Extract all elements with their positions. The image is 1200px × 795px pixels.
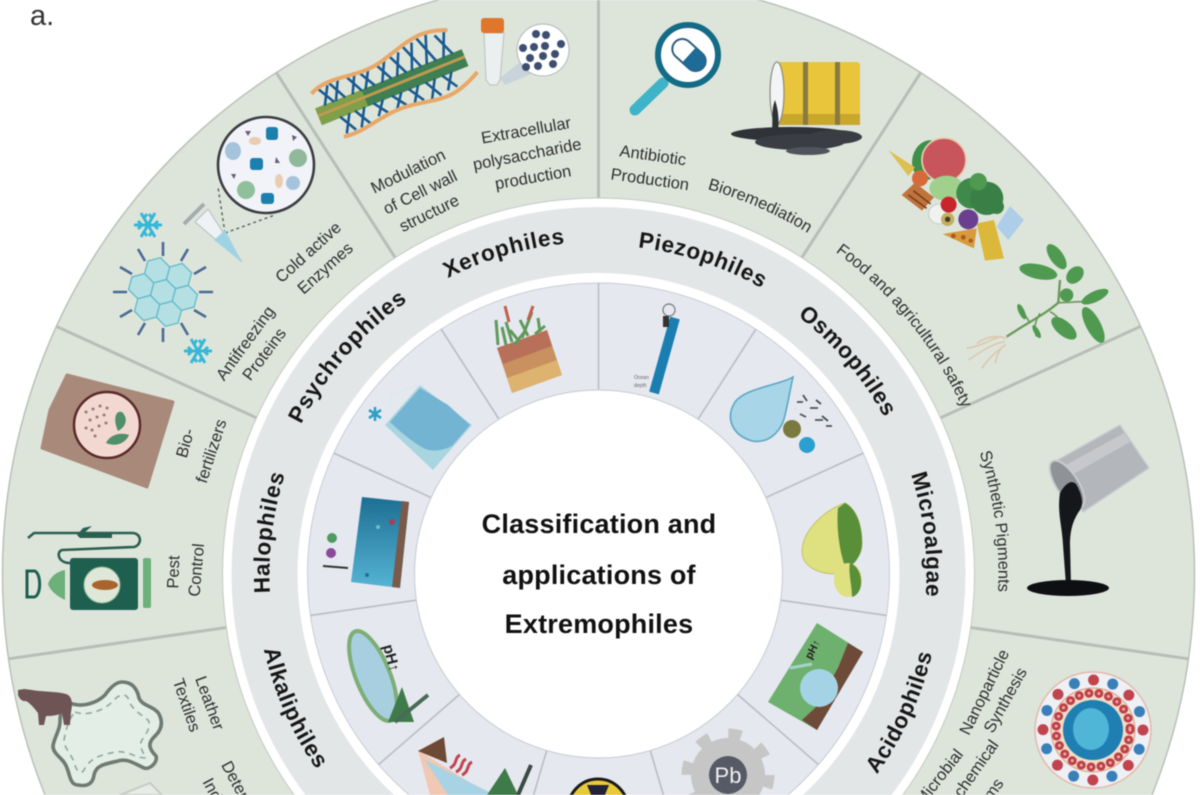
icon: pouring bucket and pigment bbox=[1027, 425, 1149, 596]
text: Antifreezing Proteins: Proteins bbox=[239, 325, 290, 384]
text: Leather Textiles: Textiles bbox=[169, 676, 204, 734]
icon: nanoparticle bbox=[1035, 672, 1151, 788]
icon: iceberg bbox=[369, 385, 472, 470]
icon: acidic lake landscape: pH↑ bbox=[803, 638, 823, 661]
center title: applications of bbox=[502, 560, 697, 590]
text: Extracellular polysaccharide production: polysaccharide bbox=[471, 135, 583, 174]
text: Extracellular polysaccharide production bbox=[471, 114, 583, 193]
text: Bio-fertilizers: fertilizers bbox=[193, 417, 230, 485]
center title bbox=[482, 509, 716, 639]
text: Pest Control: Control bbox=[185, 543, 208, 597]
text: Food and agricultural safety: Food and agricultural safety bbox=[836, 243, 971, 406]
icon: osmotic water drop bbox=[730, 377, 832, 453]
panel label: a.: a. bbox=[30, 0, 54, 32]
icon: radiation symbol bbox=[568, 779, 628, 795]
icon: gear with Pb bbox=[687, 734, 769, 795]
text: Leather Textiles bbox=[169, 674, 227, 734]
text: Pest Control bbox=[164, 543, 208, 597]
icon: saline water bbox=[323, 497, 409, 588]
text: Antifreezing Proteins: Antifreezing bbox=[213, 303, 279, 384]
icon: snowflake lower bbox=[184, 339, 212, 363]
icon: pest control sprayer bbox=[27, 526, 151, 610]
icon: magnifier with capsule bbox=[635, 25, 718, 110]
icon: detergent packet bbox=[120, 783, 162, 795]
text: Synthetic Pigments: Synthetic Pigments bbox=[979, 450, 1010, 592]
icon: pressure depth column bbox=[634, 304, 675, 393]
label: Xerophiles: Xerophiles bbox=[441, 231, 564, 278]
icon: cell wall structure bbox=[304, 20, 482, 144]
icon: alkaline lake bbox=[339, 625, 428, 727]
icon: pressure depth column: Ocean bbox=[634, 375, 649, 381]
label: Osmophiles: Osmophiles bbox=[800, 306, 894, 416]
icon: hot spring and volcano bbox=[418, 737, 531, 795]
label: Acidophiles: Acidophiles bbox=[867, 652, 932, 774]
icon: soil layers with plants bbox=[496, 306, 562, 393]
text: Modulation of Cell wall structure: structure bbox=[397, 192, 462, 236]
icon: falcon tube and polysaccharide circle bbox=[481, 18, 569, 85]
icon: enzyme magnified circle bbox=[218, 117, 314, 213]
icon: oil barrel and spill bbox=[731, 62, 862, 155]
text: Modulation of Cell wall structure: of Cell wall bbox=[381, 167, 460, 218]
label: Halophiles: Halophiles bbox=[252, 472, 284, 593]
icon: microalgae bbox=[802, 503, 862, 597]
icon: fertilizer bag bbox=[42, 375, 173, 487]
icon: gear with Pb: Pb bbox=[715, 763, 741, 788]
text: Antibiotic Production bbox=[610, 142, 690, 194]
text: Pest Control: Pest bbox=[164, 555, 183, 589]
icon: alkaline lake: pH↑ bbox=[379, 643, 403, 674]
text: Microbial Nanoparticle Biochemical Synthesis: Synthesis bbox=[980, 665, 1031, 736]
center title: Extremophiles bbox=[505, 609, 693, 639]
icon: microtube with dashed zoom lines bbox=[184, 187, 275, 262]
icon: antifreeze protein ice lattice bbox=[113, 242, 213, 342]
icon: cow bbox=[18, 689, 72, 725]
icon: pressure depth column: depth bbox=[634, 383, 647, 389]
text: Bio-fertilizers: Bio- bbox=[173, 427, 198, 460]
middle ring: extremophile names bbox=[222, 197, 976, 795]
icon: acidic lake landscape bbox=[768, 623, 863, 730]
text: Antibiotic Production: Production bbox=[610, 165, 690, 194]
text: Antibiotic Production: Antibiotic bbox=[618, 142, 687, 169]
text: Microbial Nanoparticle Biochemical Synthesis: Nanoparticle bbox=[956, 647, 1013, 738]
text: Modulation of Cell wall structure: Modulation bbox=[368, 146, 449, 197]
label: Psychrophiles: Psychrophiles bbox=[288, 292, 406, 424]
inner ring: habitats bbox=[308, 283, 890, 795]
label: Microalgae: Microalgae bbox=[911, 470, 943, 596]
label: Piezophiles: Piezophiles bbox=[638, 232, 766, 288]
label: Alkaliphiles: Alkaliphiles bbox=[263, 649, 326, 768]
icon: snowflake bbox=[134, 213, 162, 237]
text: Bio-fertilizers bbox=[173, 417, 230, 485]
text: Extracellular polysaccharide production: Extracellular bbox=[480, 114, 573, 148]
text: Extracellular polysaccharide production: production bbox=[494, 162, 573, 193]
icon: leather hide bbox=[53, 682, 161, 786]
center title: Classification and bbox=[482, 509, 716, 539]
text: Cold active Enzymes: Enzymes bbox=[294, 239, 357, 298]
icon: food cluster bbox=[888, 137, 1024, 261]
text: Microbial Nanoparticle Biochemical Synthesis bbox=[912, 647, 1031, 795]
text: Bioremediation: Bioremediation bbox=[708, 178, 812, 234]
text: Cold active Enzymes: Cold active bbox=[272, 219, 345, 287]
icon: tomato plant with roots bbox=[967, 241, 1111, 368]
text: Modulation of Cell wall structure bbox=[368, 146, 462, 236]
text: Leather Textiles: Leather bbox=[191, 674, 227, 733]
